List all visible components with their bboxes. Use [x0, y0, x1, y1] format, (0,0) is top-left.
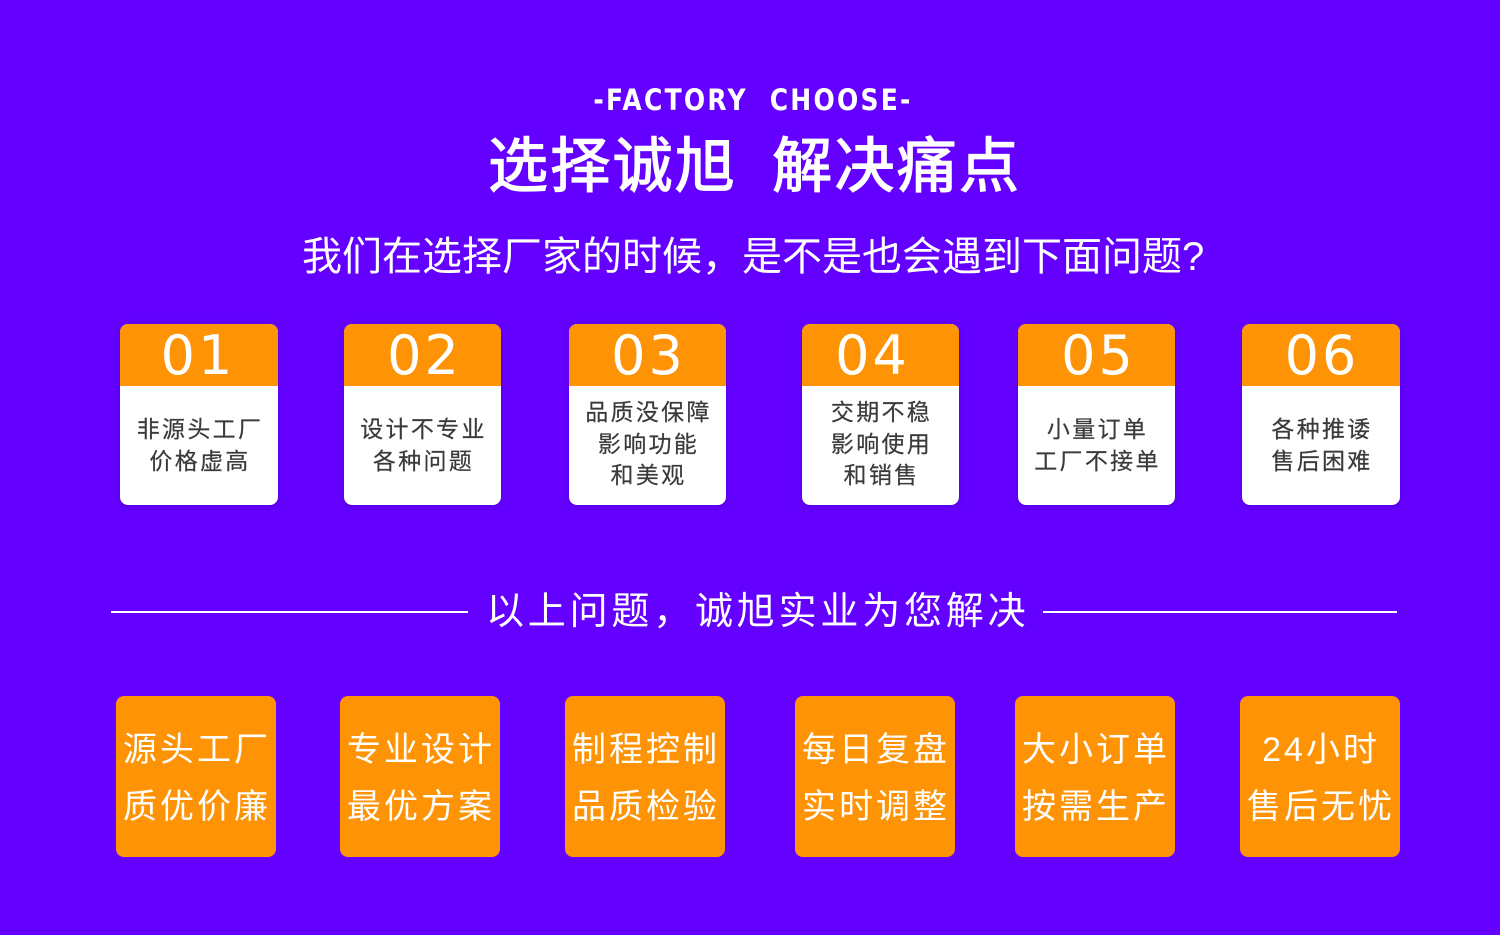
panel: problem 04: [802, 324, 959, 505]
panel: solution 1: 质优价廉: [123, 788, 271, 826]
panel: problem 01: [120, 324, 278, 505]
subtitle question: 我们在选择厂家的时候，是不是也会遇到下面问题?: [302, 235, 1204, 279]
panel: solution 5: 按需生产: [1022, 788, 1170, 826]
panel: solution 5: [1015, 696, 1175, 857]
panel: solution 6: [1240, 696, 1400, 857]
panel: problem 04: 和销售: [844, 462, 919, 488]
panel: problem 05: 小量订单: [1047, 416, 1148, 442]
english heading: -FACTORY CHOOSE-: [593, 83, 913, 117]
panel: solution 5: 大小订单: [1022, 731, 1170, 769]
panel: problem 06: 各种推诿: [1271, 416, 1373, 442]
panel: problem 01: 01: [161, 324, 235, 387]
panel: problem 01: 价格虚高: [149, 448, 251, 474]
panel: problem 03: 品质没保障: [585, 399, 712, 425]
panel: solution 1: [116, 696, 276, 857]
panel: problem 06: [1242, 324, 1400, 505]
panel: solution 2: 最优方案: [347, 788, 495, 826]
panel: solution 3: [565, 696, 725, 857]
panel: solution 4: [795, 696, 955, 857]
panel: problem 03: [569, 324, 726, 505]
panel: problem 02: [344, 324, 501, 505]
panel: solution 3: 制程控制: [572, 731, 720, 769]
title: 选择诚旭 解决痛点: [488, 133, 1021, 200]
panel: problem 06: 售后困难: [1271, 448, 1373, 474]
panel: problem 02: 设计不专业: [360, 416, 487, 442]
panel: problem 03: 03: [611, 324, 686, 387]
panel: problem 03: 影响功能: [598, 430, 699, 456]
panel: solution 2: 专业设计: [347, 731, 495, 769]
panel: problem 04: 04: [835, 324, 910, 387]
panel: problem 04: 影响使用: [831, 430, 932, 456]
panel: problem 02: 02: [387, 324, 462, 387]
panel: solution 6: 24小时: [1262, 731, 1380, 769]
panel: solution 4: 每日复盘: [802, 731, 950, 769]
panel: solution 3: 品质检验: [572, 788, 720, 826]
panel: solution 4: 实时调整: [802, 788, 950, 826]
panel: problem 05: 工厂不接单: [1034, 448, 1161, 474]
panel: problem 03: 和美观: [611, 462, 686, 488]
panel: solution 6: 售后无忧: [1247, 788, 1395, 826]
panel: problem 05: 05: [1061, 324, 1136, 387]
panel: solution 2: [340, 696, 500, 857]
divider line left: [111, 611, 468, 613]
panel: solution 1: 源头工厂: [123, 731, 271, 769]
panel: problem 02: 各种问题: [373, 448, 474, 474]
panel: problem 06: 06: [1285, 324, 1359, 387]
solution heading: 以上问题，诚旭实业为您解决: [486, 591, 1029, 633]
panel: problem 04: 交期不稳: [831, 399, 932, 425]
divider line right: [1043, 611, 1397, 613]
panel: problem 01: 非源头工厂: [137, 416, 263, 442]
panel: problem 05: [1018, 324, 1175, 505]
